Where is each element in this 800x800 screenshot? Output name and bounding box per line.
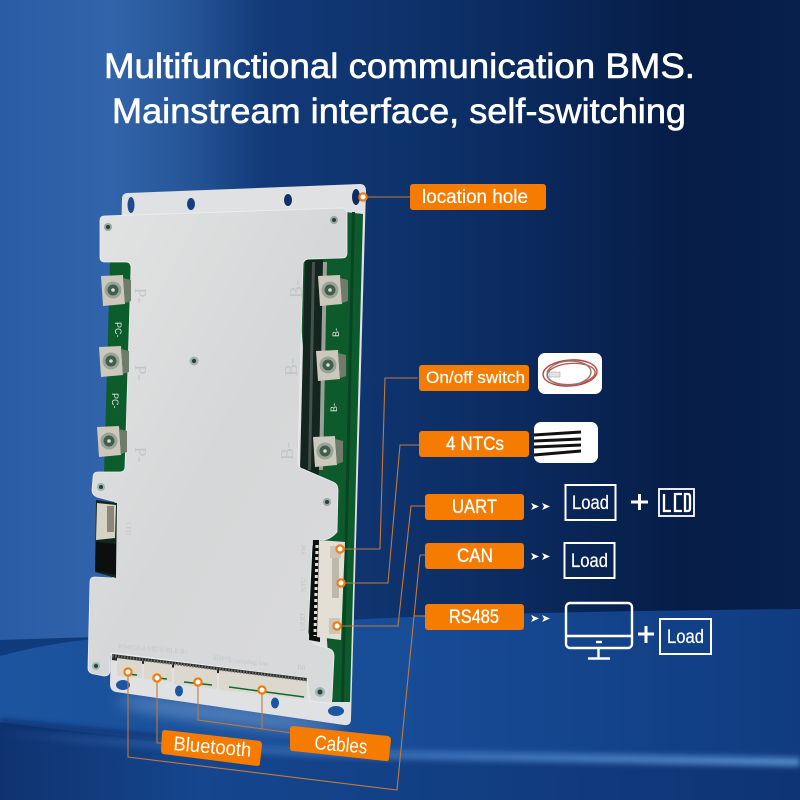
load box: UART — [566, 485, 616, 520]
load box: UART: Load — [572, 493, 609, 514]
label: location hole: location hole — [422, 187, 528, 208]
label: Bluetooth — [161, 730, 262, 766]
silkscreen: B- — [281, 358, 301, 376]
bottom connectors — [112, 654, 307, 699]
plus: RS485 — [638, 626, 654, 643]
label: UART: UART — [452, 497, 497, 518]
silkscreen: LED — [124, 522, 132, 536]
pcb left: PC- — [110, 393, 120, 409]
silkscreen: B- — [286, 280, 306, 298]
label: CAN — [425, 543, 524, 569]
title — [104, 47, 695, 131]
load box: RS485 — [660, 619, 711, 654]
label: UART — [425, 494, 524, 520]
right connectors — [309, 540, 345, 642]
silkscreen: RS485/CAN蓝牙/BLE B+ — [118, 641, 189, 656]
arrows: CAN — [531, 553, 550, 560]
icon: LCD — [659, 489, 694, 516]
title: Multifunctional communication BMS. — [104, 47, 695, 86]
label: Cables: Cables — [314, 732, 368, 759]
label: Cables — [290, 726, 391, 761]
silkscreen: SW — [300, 544, 308, 555]
load box: RS485: Load — [667, 627, 704, 648]
pcb right: B- — [331, 328, 341, 337]
icon: NTC cables — [534, 422, 598, 463]
icon: switch cable — [538, 353, 602, 394]
label: on/off switch — [419, 365, 529, 391]
silkscreen: B0 — [297, 663, 306, 672]
plus: UART — [631, 494, 648, 510]
pcb left — [104, 262, 133, 475]
arrows: UART — [531, 503, 550, 510]
pcb right: B- — [329, 403, 339, 412]
label: 4 NTCs — [419, 431, 529, 457]
label: on/off switch: On/off switch — [426, 368, 525, 387]
connector markers — [124, 193, 367, 694]
LED connector — [95, 500, 117, 578]
silkscreen: 采样线/sampling line — [212, 653, 269, 668]
silkscreen: NTC — [300, 578, 308, 592]
icon: monitor — [566, 603, 632, 658]
nuts — [97, 275, 348, 467]
leader lines — [128, 197, 425, 790]
label: 4 NTCs: 4 NTCs — [446, 434, 504, 455]
label: RS485 — [425, 604, 524, 630]
silkscreen: UART — [299, 612, 307, 631]
back plate — [110, 184, 366, 725]
silkscreen — [118, 280, 308, 672]
label: location hole — [410, 184, 546, 210]
silkscreen: B- — [277, 442, 297, 460]
silkscreen: P- — [131, 365, 150, 380]
title: Mainstream interface, self-switching — [112, 92, 686, 131]
BMS board — [88, 184, 366, 725]
pcb right — [296, 212, 363, 702]
silkscreen: P- — [131, 447, 150, 462]
load box: CAN — [564, 543, 614, 578]
label: Bluetooth: Bluetooth — [173, 733, 252, 762]
arrows: RS485 — [531, 615, 550, 622]
front plate — [88, 208, 347, 703]
load box: CAN: Load — [571, 551, 608, 572]
pcb left: PC- — [113, 322, 123, 338]
plate screws — [92, 216, 338, 697]
label: CAN: CAN — [457, 546, 493, 567]
silkscreen: P- — [131, 288, 150, 303]
label: RS485: RS485 — [449, 607, 499, 628]
